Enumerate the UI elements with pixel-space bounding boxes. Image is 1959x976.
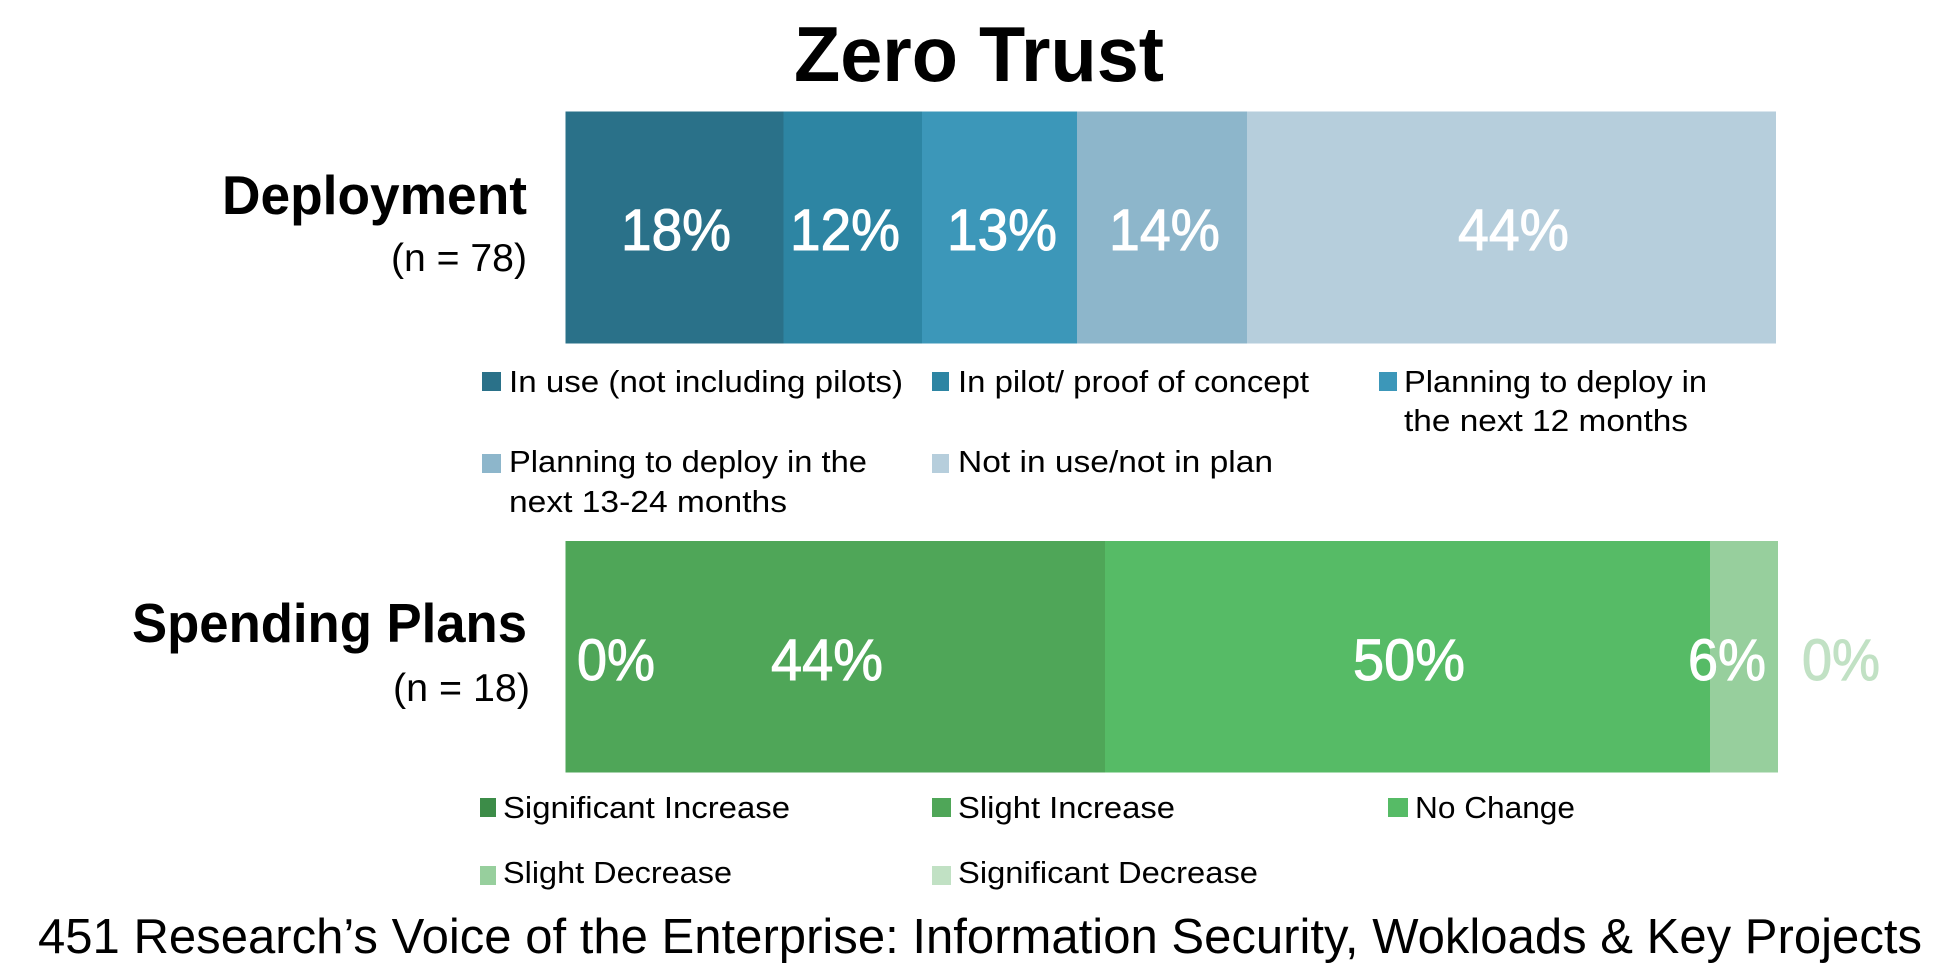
heading: deployment: Deployment (222, 164, 527, 226)
stacked bar: spending plans: 6% (1688, 628, 1766, 693)
stacked bar: deployment (566, 112, 1776, 344)
legend: spending plans: Significant Increase (503, 790, 790, 825)
stacked bar: spending plans: 0% (577, 628, 655, 693)
stacked bar: spending plans: 0% (1802, 628, 1880, 693)
legend: spending plans: Slight Increase (958, 790, 1175, 825)
stacked bar: deployment: 12% (790, 198, 900, 263)
legend: deployment: Not in use/not in plan (958, 444, 1273, 479)
title: Zero Trust (794, 10, 1164, 98)
panel: spending plans (132, 541, 1880, 890)
heading: spending plans: Spending Plans (132, 592, 527, 654)
stacked bar: spending plans: 50% (1353, 628, 1465, 693)
legend: spending plans: Significant Decrease (958, 855, 1258, 890)
legend: spending plans (480, 790, 1575, 890)
heading: spending plans (132, 592, 530, 710)
legend: deployment (482, 364, 1707, 519)
legend: spending plans: Slight Decrease (503, 855, 732, 890)
stacked bar: spending plans (566, 541, 1880, 772)
stacked bar: spending plans: 44% (771, 628, 883, 693)
heading: deployment (222, 164, 527, 280)
panel: deployment (222, 112, 1776, 519)
stacked bar: deployment: 18% (621, 198, 731, 263)
stacked bar: deployment: 13% (947, 198, 1057, 263)
legend: deployment: next 13-24 months (509, 484, 787, 519)
legend: deployment: In pilot/ proof of concept (958, 364, 1309, 399)
legend: deployment: Planning to deploy in (1404, 364, 1707, 399)
legend: deployment: the next 12 months (1404, 403, 1688, 438)
stacked bar: deployment: 44% (1458, 198, 1569, 263)
heading: deployment: (n = 78) (391, 237, 527, 280)
legend: deployment: Planning to deploy in the (509, 444, 867, 479)
heading: spending plans: (n = 18) (393, 667, 530, 710)
legend: spending plans: No Change (1415, 790, 1575, 825)
stacked bar: deployment: 14% (1109, 198, 1220, 263)
footer source line: 451 Research’s Voice of the Enterprise: Information Security, Wokloads & Key Projects (38, 910, 1922, 964)
legend: deployment: In use (not including pilots) (509, 364, 903, 399)
